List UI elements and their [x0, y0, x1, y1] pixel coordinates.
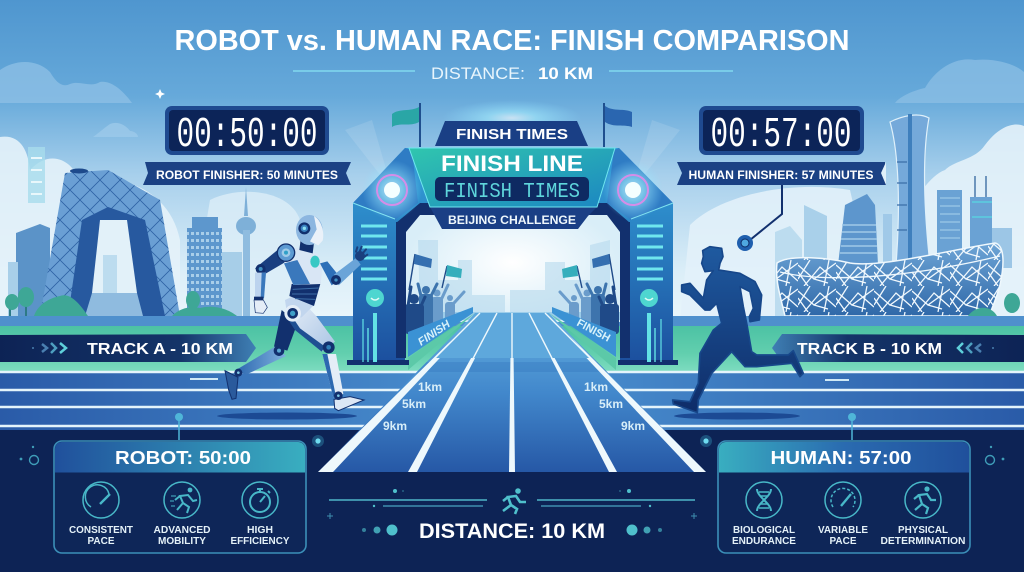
robot labels: HIGH — [247, 525, 273, 536]
crowd left — [405, 254, 464, 334]
robot labels: CONSISTENT — [69, 525, 133, 536]
green panel: finish line — [409, 148, 615, 207]
bottom tab: beijing challenge — [430, 207, 597, 229]
ribbon: human finisher — [677, 162, 886, 185]
icon: runner — [905, 482, 941, 518]
human labels: PHYSICAL — [898, 525, 948, 536]
kilometre markers: 9km — [383, 419, 407, 433]
pillar stripes right — [637, 226, 663, 279]
human labels: BIOLOGICAL — [733, 525, 795, 536]
title: ROBOT vs. HUMAN RACE: FINISH COMPARISON — [174, 25, 850, 57]
panel: robot stats — [54, 441, 306, 553]
center track in perspective — [318, 322, 706, 472]
human runner silhouette — [673, 247, 803, 413]
banner: track B — [772, 334, 1024, 362]
robot runner — [225, 215, 367, 411]
timer: robot: 00:50:00 — [176, 110, 318, 159]
kilometre markers — [383, 380, 645, 433]
trees and bushes — [5, 287, 1020, 316]
subtitle: distance — [293, 64, 733, 83]
panel: human stats — [718, 441, 970, 553]
banner: track B: TRACK B - 10 KM — [797, 341, 942, 358]
robot rear leg — [225, 310, 297, 399]
robot panel header — [55, 442, 305, 472]
clouds — [0, 59, 1024, 320]
skyline: left — [8, 147, 256, 316]
human labels — [732, 525, 966, 547]
human labels: VARIABLE — [818, 525, 868, 536]
ground bands — [0, 316, 1024, 372]
pillar stripes left — [361, 226, 387, 279]
robot front leg — [285, 298, 364, 411]
arch lights — [362, 160, 663, 220]
track: horizontal lanes — [0, 372, 1024, 572]
robot labels: EFFICIENCY — [230, 536, 290, 547]
human labels: DETERMINATION — [880, 536, 966, 547]
kilometre markers: 1km — [584, 380, 608, 394]
arch frame — [353, 148, 673, 363]
ribbon: human finisher: HUMAN FINISHER: 57 MINUTES — [688, 170, 874, 182]
green panel: finish line: FINISH LINE — [441, 151, 583, 176]
icon: variable gauge — [825, 482, 861, 518]
robot labels: ADVANCED — [154, 525, 210, 536]
robot rear arm — [254, 247, 292, 313]
banner: track A: TRACK A - 10 KM — [87, 341, 233, 358]
human panel header — [719, 442, 969, 472]
kilometre markers: 5km — [599, 397, 623, 411]
robot torso — [277, 244, 323, 322]
ribbon: robot finisher: ROBOT FINISHER: 50 MINUTES — [156, 170, 338, 182]
robot panel title: ROBOT: 50:00 — [115, 448, 251, 468]
icon: stopwatch — [242, 482, 278, 518]
robot front arm — [320, 247, 367, 285]
sparkle — [155, 89, 165, 99]
barrier left: FINISH — [416, 318, 453, 348]
human panel title: HUMAN: 57:00 — [770, 448, 912, 468]
arch bases — [347, 360, 678, 365]
timer: robot — [165, 106, 329, 159]
connector dots — [175, 413, 856, 440]
robot labels: MOBILITY — [158, 536, 206, 547]
human labels: PACE — [830, 536, 857, 547]
robot head — [296, 215, 323, 253]
building: bird's nest stadium — [777, 243, 1003, 316]
flag left — [392, 103, 421, 147]
banner: track A — [0, 334, 256, 362]
flag right — [603, 103, 632, 147]
top tab: finish times: FINISH TIMES — [456, 126, 568, 143]
shoulder plates — [353, 148, 673, 220]
finish arch — [345, 100, 680, 370]
barrier right: FINISH — [575, 317, 612, 345]
green panel: finish line: FINISH TIMES — [444, 181, 580, 204]
shadows under runners — [217, 412, 800, 420]
top tab: finish times — [435, 121, 588, 146]
pillar badges and bars — [362, 289, 662, 362]
timer: human: 00:57:00 — [710, 110, 852, 159]
arch opening scene — [405, 203, 620, 370]
icon: footer runner — [503, 488, 526, 514]
ribbon: robot finisher — [143, 162, 351, 185]
barrier right — [552, 307, 616, 357]
subtitle: distance: 10 KM — [538, 64, 593, 83]
sky background — [0, 0, 1024, 320]
robot labels — [69, 525, 290, 547]
light rays — [345, 120, 680, 190]
barrier left — [408, 307, 473, 357]
kilometre markers: 5km — [402, 397, 426, 411]
icon: fast runner — [164, 482, 200, 518]
connector: human finisher pin — [737, 185, 782, 251]
icon: DNA — [746, 482, 782, 518]
arch inner dark edge — [396, 203, 630, 232]
top glow — [442, 100, 582, 136]
subtitle: distance: DISTANCE: — [431, 64, 525, 83]
timer: human — [699, 106, 864, 159]
skyline: right — [775, 114, 1012, 316]
glow dots and decorations — [20, 435, 1004, 464]
footer: distance: DISTANCE: 10 KM — [419, 520, 605, 543]
crowd right — [560, 254, 619, 334]
building: CCTV tower — [40, 168, 180, 316]
kilometre markers: 9km — [621, 419, 645, 433]
bottom tab: beijing challenge: BEIJING CHALLENGE — [448, 213, 576, 227]
robot labels: PACE — [88, 536, 115, 547]
icon: gauge — [83, 482, 119, 518]
kilometre markers: 1km — [418, 380, 442, 394]
footer: distance — [327, 488, 697, 543]
human labels: ENDURANCE — [732, 536, 796, 547]
